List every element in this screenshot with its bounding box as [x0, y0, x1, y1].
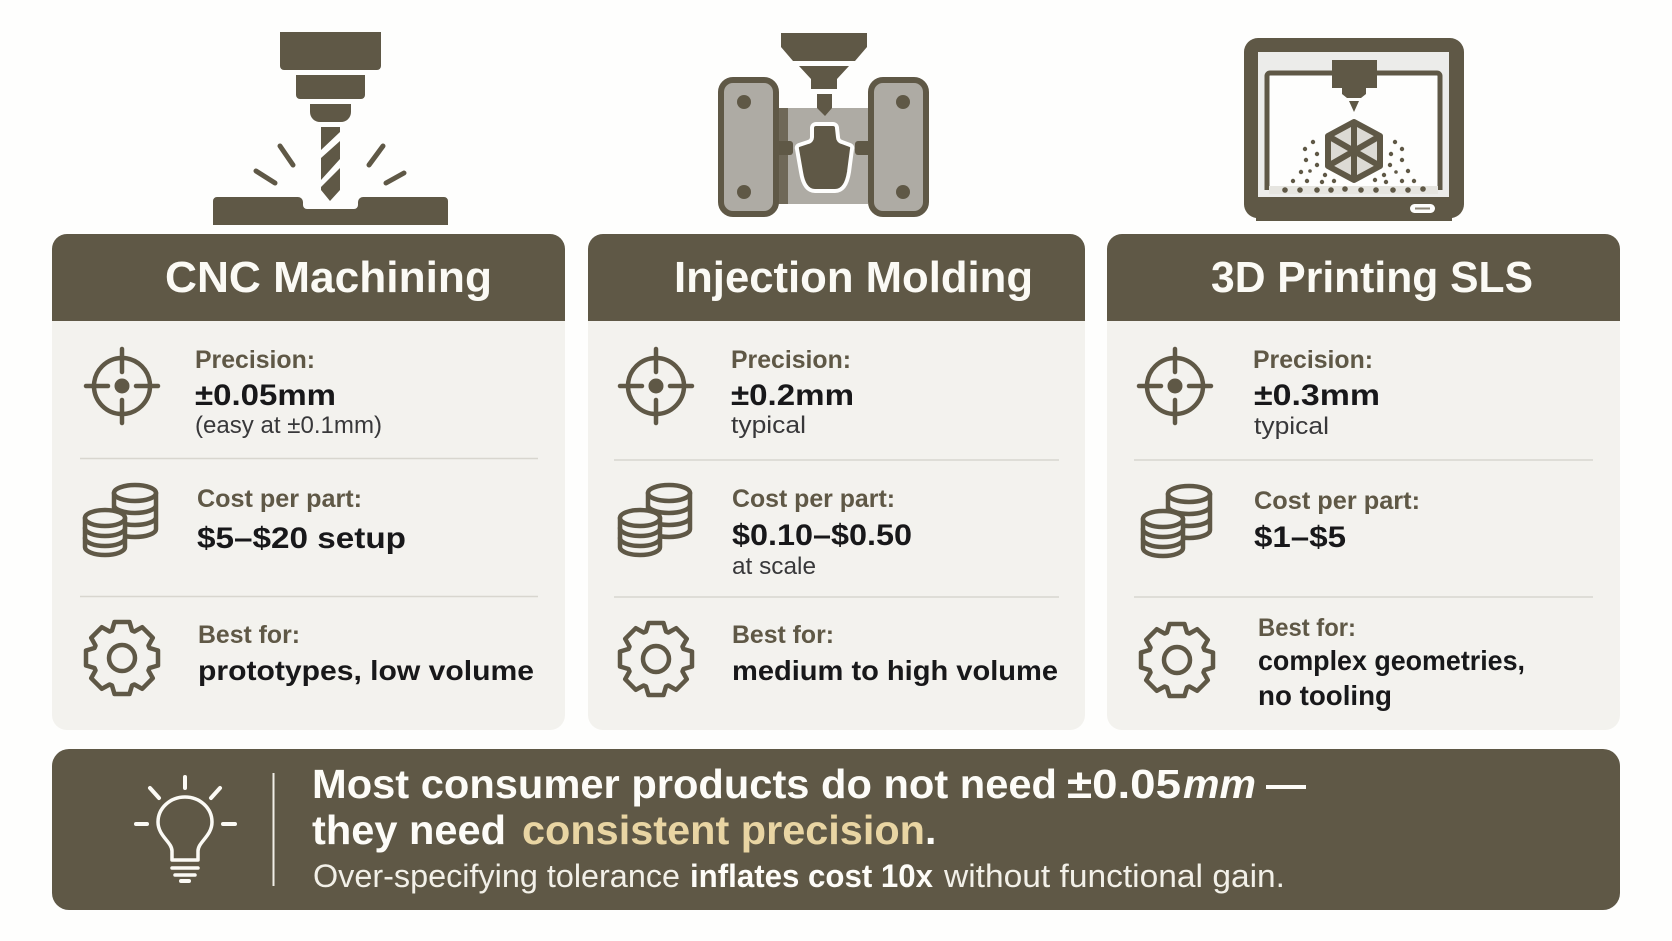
icon: CNC spindle milling a workpiece: [213, 32, 448, 225]
header: CNC Machining: CNC Machining: [165, 253, 492, 302]
header: 3D Printing SLS: [1107, 234, 1620, 321]
row: cost: Cost per part:: [1254, 487, 1420, 515]
row: cost: Cost per part:: [732, 485, 895, 513]
supporting line: [313, 858, 1285, 894]
panel: 3D Printing SLS: [1107, 234, 1620, 730]
row: precision: [1139, 346, 1380, 440]
header: Injection Molding: Injection Molding: [674, 253, 1033, 302]
header: Injection Molding: [588, 234, 1085, 321]
row: cost: Cost per part:: [197, 485, 362, 513]
header: 3D Printing SLS: 3D Printing SLS: [1211, 253, 1533, 302]
row: best for: Best for:: [1258, 614, 1356, 642]
row: cost: $1–$5: [1254, 521, 1346, 554]
row: best for: prototypes, low volume: [198, 655, 534, 686]
callout: key takeaway banner: [52, 749, 1620, 910]
row: precision: [86, 346, 382, 439]
headline emphasis: consistent precision: [522, 807, 925, 853]
row: best for: [86, 621, 534, 694]
supporting line: without functional gain.: [943, 858, 1285, 894]
panel: Injection Molding: [588, 234, 1085, 730]
panel: CNC Machining: [52, 234, 565, 730]
row: precision: ±0.3mm: [1254, 379, 1380, 412]
row: best for: [1141, 614, 1525, 711]
row: cost: [1143, 486, 1420, 556]
icon: SLS 3D printer: [1244, 38, 1464, 221]
row: best for: Best for:: [198, 621, 300, 649]
row: precision: ±0.2mm: [731, 379, 854, 412]
row: best for: complex geometries,: [1258, 645, 1525, 676]
row: best for: [620, 621, 1058, 695]
row: precision: [620, 346, 854, 439]
headline: ±0.05: [1067, 761, 1181, 807]
row: precision: Precision:: [1253, 346, 1373, 374]
icon: injection mold: [721, 33, 926, 214]
row: precision: Precision:: [731, 346, 851, 374]
headline emphasis: .: [925, 807, 936, 853]
row: cost: $0.10–$0.50: [732, 519, 912, 552]
supporting line: inflates cost 10x: [690, 858, 933, 894]
row: precision: typical: [731, 412, 806, 439]
row: best for: medium to high volume: [732, 655, 1058, 686]
row: best for: no tooling: [1258, 680, 1392, 711]
header: CNC Machining: [52, 234, 565, 321]
row: cost: $5–$20 setup: [197, 522, 406, 555]
headline: Most consumer products do not need: [312, 761, 1057, 807]
headline emphasis: [312, 807, 936, 853]
row: precision: (easy at ±0.1mm): [195, 412, 382, 439]
row: best for: Best for:: [732, 621, 834, 649]
supporting line: Over-specifying tolerance: [313, 858, 680, 894]
row: precision: typical: [1254, 413, 1329, 440]
row: cost: at scale: [732, 553, 816, 580]
icon: light bulb: [136, 777, 235, 881]
row: cost: [620, 485, 912, 580]
headline: mm: [1183, 761, 1256, 807]
headline: —: [1266, 761, 1306, 807]
row: cost: [85, 485, 406, 555]
headline emphasis: they need: [312, 807, 506, 853]
row: precision: Precision:: [195, 346, 315, 374]
row: precision: ±0.05mm: [195, 379, 336, 412]
